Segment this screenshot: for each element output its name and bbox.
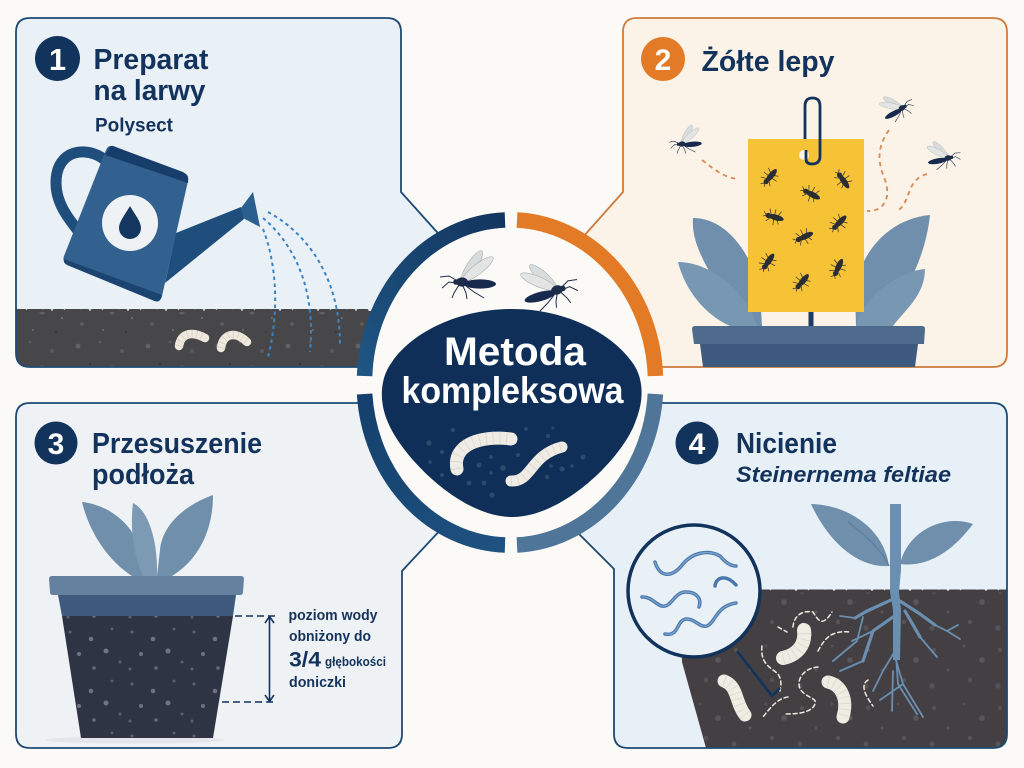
water level note: głębokości: [325, 655, 386, 669]
gnats above title: [440, 248, 583, 315]
larvae in soil: [179, 334, 247, 348]
magnifier with nematodes: [628, 525, 780, 696]
central badge: [357, 212, 663, 552]
heading 4: Steinernema feltiae: [736, 462, 951, 487]
blob speckles: [426, 426, 586, 498]
number badge 1: 1: [49, 42, 66, 77]
icon: watering can: [56, 146, 260, 302]
water streams: [263, 212, 340, 357]
heading 3: [92, 428, 262, 491]
ring arc 1: [365, 220, 505, 376]
central title: [402, 330, 624, 411]
plant leaves behind card: [678, 215, 930, 326]
panel 2: zolte lepy: [575, 18, 1007, 367]
central title: kompleksowa: [402, 370, 624, 411]
heading 4: Nicienie: [736, 428, 837, 460]
flower pot: [692, 326, 925, 367]
central title: Metoda: [444, 330, 587, 374]
water level note: [288, 608, 386, 691]
heading 1: na larwy: [94, 75, 206, 107]
number badge 1: [35, 36, 80, 81]
plant with roots: [811, 504, 973, 717]
flight paths: [702, 130, 927, 212]
white central disc: [357, 212, 663, 552]
water level note: obniżony do: [289, 629, 371, 645]
central larvae: [456, 438, 562, 481]
heading 2: Żółte lepy: [702, 46, 834, 78]
subheading polysect: Polysect: [95, 116, 174, 136]
heading 4: [736, 428, 951, 487]
water level note: 3/4: [289, 648, 321, 672]
number badge 4: [676, 422, 718, 464]
hanging stick: [808, 310, 814, 328]
number badge 2: 2: [655, 44, 671, 77]
trapped insects: [755, 164, 855, 296]
heading 1: [94, 44, 209, 107]
navy blob: [382, 309, 642, 517]
soil cross-section: [680, 591, 1007, 748]
ring arc 3: [365, 394, 505, 545]
ring arc 4: [517, 394, 655, 545]
panel 3: przesuszenie podloza: [16, 403, 445, 748]
water level note: poziom wody: [288, 608, 378, 624]
panel 4: nicienie: [575, 403, 1007, 748]
number badge 4: 4: [689, 428, 706, 461]
yellow sticky trap: [748, 139, 864, 312]
number badge 3: [34, 422, 78, 464]
number badge 3: 3: [48, 428, 64, 461]
heading 3: Przesuszenie: [92, 428, 262, 460]
panel 1: preparat na larwy: [16, 18, 445, 367]
pot: [49, 576, 244, 738]
heading 3: podłoża: [92, 459, 195, 491]
water level note: doniczki: [289, 675, 346, 691]
ground shadow: [45, 736, 225, 744]
plant leaves: [82, 495, 213, 576]
paperclip hook: [805, 98, 820, 164]
water level markers: [222, 616, 277, 702]
number badge 2: [641, 37, 685, 81]
ring arc 2: [517, 220, 655, 376]
white larvae and tunnels: [724, 612, 873, 717]
heading 1: Preparat: [94, 44, 209, 76]
flying gnats: [668, 85, 963, 172]
